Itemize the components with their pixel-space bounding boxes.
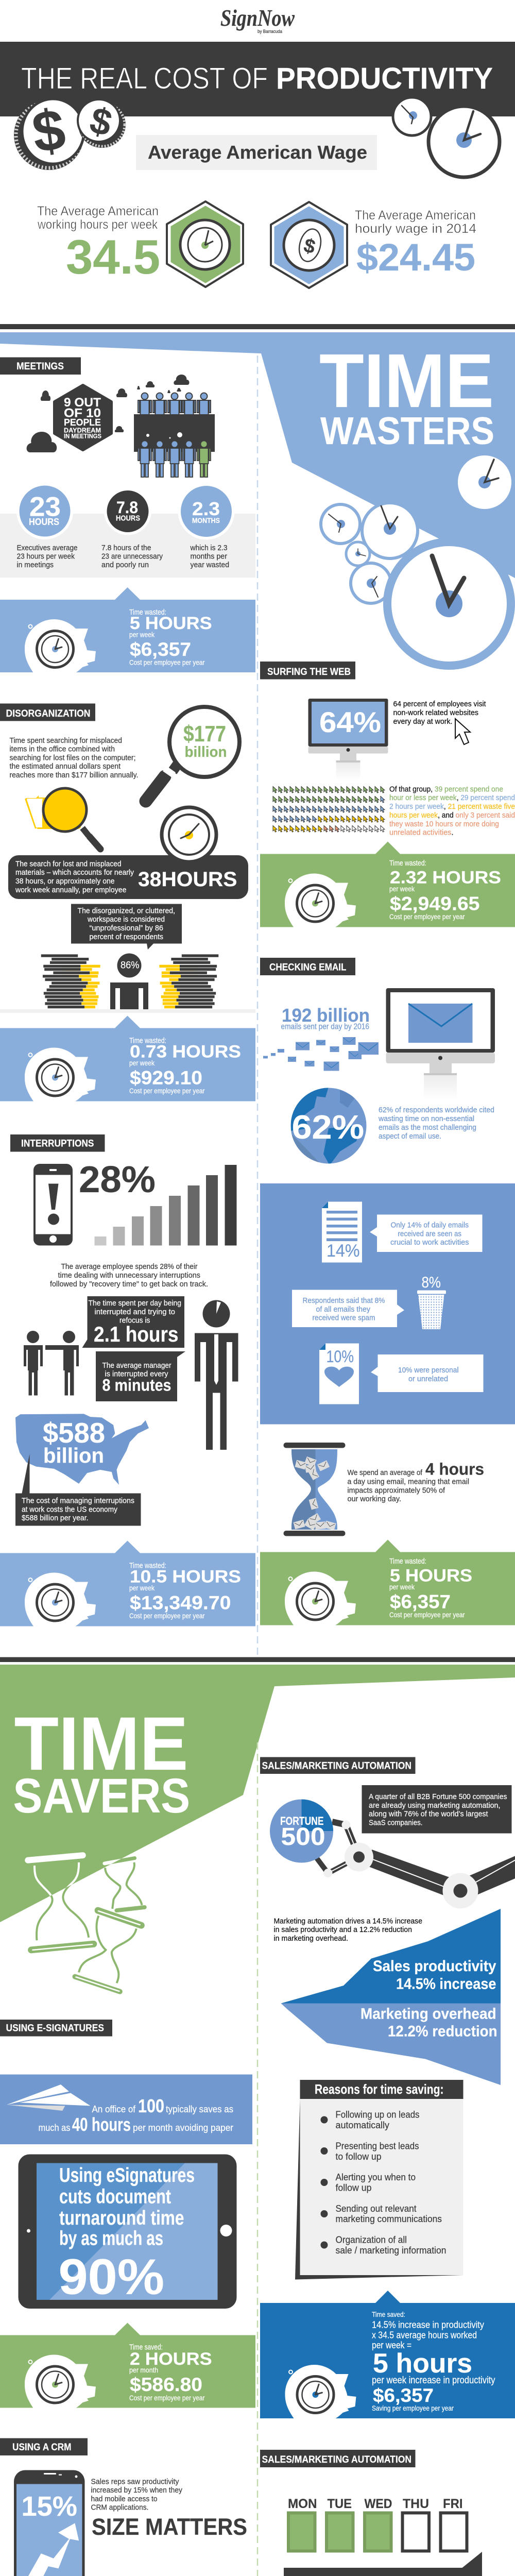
panel: reasons for time saving: Reasons for time saving: xyxy=(315,2081,444,2097)
icon: daydream clouds xyxy=(27,375,190,452)
text: 64 percent visit xyxy=(393,700,486,726)
shape: sales productivity: Sales productivity xyxy=(373,1958,496,1975)
panel: time wasted web: $2,949.65 xyxy=(390,893,480,914)
panel: time saved sales automation: per week = xyxy=(372,2340,411,2350)
chart: rising bars xyxy=(95,1165,237,1246)
panel: email breakdown: 8% xyxy=(421,1274,441,1291)
icon: folder with magnifier xyxy=(25,788,100,849)
tab: meetings xyxy=(0,358,81,375)
heading: time savers: TIME xyxy=(14,1702,188,1786)
text: 4 hours email: 4 hours xyxy=(425,1460,484,1479)
panel: time saved sales automation: Time saved: xyxy=(372,2310,405,2318)
stat: working hours: 34.5 xyxy=(66,230,160,284)
heading: time savers: SAVERS xyxy=(13,1769,190,1823)
icon: clock yellow xyxy=(162,807,216,862)
icon: tablet 90 percent xyxy=(19,2155,237,2309)
icon: clocks xyxy=(393,97,500,177)
icon: smartphone 15 percent: 15% xyxy=(22,2491,77,2522)
text: 64 percent visit: every day at work. xyxy=(393,717,452,726)
icon: magnifier 177 billion: billion xyxy=(184,744,227,760)
panel: time saved esignatures: 2 HOURS xyxy=(130,2349,212,2369)
band: meeting stats: HOURS xyxy=(29,517,59,527)
callout: 2.1 hours xyxy=(82,1296,184,1348)
panel: reasons for time saving: Following up on leads xyxy=(336,2109,419,2120)
panel: time saved sales automation xyxy=(260,2291,515,2418)
shape: marketing overhead: 12.2% reduction xyxy=(388,2023,497,2040)
heading: average american wage xyxy=(136,135,377,170)
callout: cost of interruptions: The cost of managing interruptions xyxy=(22,1496,134,1505)
icon: cursor xyxy=(455,719,470,744)
text: 4 hours email xyxy=(347,1460,484,1503)
text: of that group: unrelated activities. xyxy=(389,828,453,837)
band: meeting stats: in meetings xyxy=(16,561,54,569)
tab: using a crm xyxy=(0,2438,88,2455)
tab: surfing the web: SURFING THE WEB xyxy=(267,667,351,677)
callout: 38 hours: work week annually, per employee xyxy=(15,886,126,894)
band: meeting stats: 7.8 xyxy=(116,498,138,517)
logo: SignNow top: SignNow xyxy=(220,5,295,31)
panel: time wasted interruptions: $13,349.70 xyxy=(130,1592,231,1614)
callout: 38 hours: The search for lost and misplaced xyxy=(15,859,122,869)
panel: time wasted disorganization: Time wasted: xyxy=(129,1037,166,1045)
callout: unprofessional: workspace is considered xyxy=(87,915,165,924)
stat: 192 billion emails: emails sent per day by 2016 xyxy=(281,1022,369,1031)
callout: 8 minutes xyxy=(96,1351,185,1401)
panel: time saved sales automation: x 34.5 average hours worked xyxy=(372,2330,477,2340)
text: of that group: they waste 10 hours or more doing xyxy=(389,820,499,828)
panel: time wasted email: Time wasted: xyxy=(389,1557,426,1566)
panel: email breakdown: received are seen as xyxy=(398,1229,461,1239)
icon: hourglass with emails xyxy=(283,1443,345,1536)
tab: disorganization xyxy=(0,704,95,721)
icon: monitor 64 percent xyxy=(308,699,388,781)
title: PRODUCTIVITY xyxy=(276,62,493,95)
callout: 38 hours xyxy=(8,855,248,899)
panel: time wasted disorganization: per week xyxy=(129,1059,155,1067)
icon: monitor 64 percent: 64% xyxy=(319,706,381,738)
text: 4 hours email: impacts approximately 50% of xyxy=(347,1486,445,1495)
panel: time wasted disorganization: 0.73 HOURS xyxy=(130,1042,241,1061)
icon: green hexagon clock xyxy=(167,201,243,287)
text: 28 percent explanation xyxy=(50,1262,208,1289)
panel: email breakdown: received were spam xyxy=(312,1314,375,1322)
panel: paper savings: An office of xyxy=(92,2104,136,2114)
panel: email breakdown xyxy=(260,1183,515,1424)
callout: unprofessional xyxy=(71,904,182,950)
shape: sales productivity xyxy=(281,1909,501,2003)
tab: sales marketing automation 2 xyxy=(260,2450,415,2467)
text: 28 percent explanation: followed by "recovery time" to get back on track. xyxy=(50,1280,208,1289)
panel: time saved esignatures: Time saved: xyxy=(129,2343,163,2351)
callout: fortune 500 text: along with 76% of the world’s largest xyxy=(369,1809,488,1819)
band: meeting stats: HOURS xyxy=(116,514,140,522)
icon: hexagon 9 out of 10 xyxy=(55,385,111,450)
icon: coins: $ xyxy=(86,99,116,144)
icon: tablet 90 percent: turnaround time xyxy=(59,2207,184,2229)
panel: reasons for time saving: Organization of all xyxy=(336,2235,407,2245)
text: 4 hours email: We spend an average of xyxy=(347,1468,423,1477)
icon: smartphone 15 percent xyxy=(14,2470,84,2576)
panel: time wasted meetings: 5 HOURS xyxy=(130,614,212,633)
icon: tablet 90 percent: 90% xyxy=(59,2248,164,2305)
panel: paper savings: per month avoiding paper xyxy=(133,2123,233,2133)
callout: 8 minutes: 8 minutes xyxy=(102,1376,171,1394)
panel: time wasted meetings: Cost per employee per year xyxy=(129,658,205,667)
callout: 2.1 hours: refocus is xyxy=(119,1316,150,1325)
icon: meeting table with people xyxy=(134,393,215,477)
icon: globe 62 percent: 62% xyxy=(291,1108,364,1146)
callout: unprofessional: “unprofessional” by 86 xyxy=(90,924,163,933)
tab: checking email: CHECKING EMAIL xyxy=(269,962,347,973)
logo: SignNow top: by Barracuda xyxy=(258,29,282,34)
panel: time wasted meetings xyxy=(0,587,255,673)
band: meeting stats: and poorly run xyxy=(101,561,149,569)
icon: US map 588 billion xyxy=(15,1414,149,1485)
panel: time wasted email: Cost per employee per year xyxy=(389,1611,465,1619)
icon: phone alert xyxy=(33,1164,73,1246)
title: THE REAL COST OF xyxy=(21,62,268,95)
chart: work week days: MON xyxy=(288,2497,317,2511)
text: sales reps: CRM applications. xyxy=(91,2503,148,2512)
callout: 2.1 hours: interrupted and trying to xyxy=(95,1308,175,1316)
chart: work week days: FRI xyxy=(443,2497,462,2511)
panel: email breakdown: Only 14% of daily emails xyxy=(390,1221,469,1229)
panel: reasons for time saving: Sending out relevant xyxy=(336,2204,416,2214)
text: 64 percent visit: non-work related websites xyxy=(393,708,478,717)
panel: time wasted disorganization: $929.10 xyxy=(130,1067,202,1088)
text: marketing automation drives: Marketing automation drives a 14.5% increase xyxy=(274,1917,422,1926)
stat: hourly wage: The Average American xyxy=(355,208,476,223)
icon: hourglasses xyxy=(28,1855,145,1992)
panel: reasons for time saving: follow up xyxy=(336,2182,372,2193)
icon: coins: $ xyxy=(28,97,69,165)
stat: working hours: The Average American xyxy=(37,204,159,218)
text: 62 percent: 62% of respondents worldwide cited xyxy=(379,1106,494,1114)
icon: left paper stack xyxy=(41,954,100,1008)
chart: cursor pictogram xyxy=(273,786,385,832)
band: meeting stats: MONTHS xyxy=(192,516,220,524)
callout: 38 hours: 38 hours, or approximately one xyxy=(15,877,114,886)
icon: manager with clock head xyxy=(195,1300,238,1450)
icon: wall clocks xyxy=(321,455,511,666)
text: of that group xyxy=(389,785,515,837)
tab: using a crm: USING A CRM xyxy=(12,2442,71,2453)
text: marketing automation drives: in marketing overhead. xyxy=(274,1934,348,1943)
callout: unprofessional: percent of respondents xyxy=(90,933,163,941)
callout: fortune 500 text xyxy=(362,1785,512,1833)
text: sales reps: Sales reps saw productivity xyxy=(91,2477,179,2486)
panel: time wasted interruptions xyxy=(0,1540,255,1626)
text: marketing automation drives xyxy=(274,1917,422,1943)
panel: reasons for time saving: Alerting you when to xyxy=(336,2172,416,2182)
callout: cost of interruptions: $588 billion per year. xyxy=(22,1514,89,1522)
text: 28 percent explanation: time dealing with unnecessary interruptions xyxy=(58,1271,200,1280)
band: meeting stats: which is 2.3 xyxy=(190,544,228,552)
stat: 28 percent: 28% xyxy=(79,1159,156,1200)
stat: hourly wage: $24.45 xyxy=(356,236,475,279)
panel: paper savings: typically saves as xyxy=(166,2104,233,2114)
callout: 2.1 hours: 2.1 hours xyxy=(94,1322,178,1346)
icon: hexagon 9 out of 10: PEOPLE xyxy=(64,417,101,428)
icon: hexagon 9 out of 10: DAYDREAM xyxy=(64,427,101,434)
text: 62 percent xyxy=(378,1106,494,1141)
callout: fortune 500 text: A quarter of all B2B Fortune 500 companies xyxy=(369,1792,507,1801)
text: 4 hours email: a day using email, meaning that email xyxy=(347,1478,469,1486)
panel: email breakdown: crucial to work activities xyxy=(390,1238,469,1247)
stat: working hours xyxy=(37,204,160,284)
panel: time saved sales automation: 5 hours xyxy=(373,2348,472,2379)
heading: average american wage: Average American Wage xyxy=(148,142,367,163)
panel: time wasted meetings: $6,357 xyxy=(130,639,191,660)
icon: tablet 90 percent: cuts document xyxy=(59,2185,171,2208)
tab: checking email xyxy=(260,958,355,975)
text: 62 percent: aspect of email use. xyxy=(379,1132,441,1141)
icon: hexagon 9 out of 10: OF 10 xyxy=(64,406,101,420)
panel: time saved sales automation: Saving per employee per year xyxy=(372,2404,454,2412)
callout: cost of interruptions: at work costs the US economy xyxy=(22,1505,117,1514)
panel: reasons for time saving xyxy=(295,2080,464,2279)
text: of that group: Of that group, 39 percent spend one xyxy=(389,785,503,793)
chart: work week days: TUE xyxy=(328,2497,352,2511)
text: 62 percent: wasting time on non-essential xyxy=(378,1114,474,1123)
panel: paper savings xyxy=(0,2074,252,2144)
panel: time wasted email xyxy=(260,1539,515,1625)
text: misplaced items xyxy=(9,736,138,779)
icon: US map 588 billion: $588 xyxy=(43,1417,105,1449)
tab: surfing the web xyxy=(260,662,355,679)
chart: work week days: THU xyxy=(403,2497,429,2511)
band: meeting stats: months per xyxy=(191,552,227,561)
shape: marketing overhead xyxy=(281,2003,501,2085)
icon: flying envelopes xyxy=(263,1037,379,1071)
panel: time saved sales automation: per week increase in productivity xyxy=(372,2375,495,2386)
text: sales reps: had mobile access to xyxy=(91,2495,158,2503)
panel: time wasted web: Cost per employee per year xyxy=(389,912,465,921)
callout: cost of interruptions xyxy=(15,1454,141,1526)
tab: meetings: MEETINGS xyxy=(16,361,64,372)
callout: unprofessional: The disorganized, or cluttered, xyxy=(77,907,175,915)
chart: fortune 500 pie xyxy=(270,1799,333,1863)
panel: time wasted web: per week xyxy=(389,885,415,893)
panel: paper savings: much as xyxy=(38,2123,70,2133)
icon: coins xyxy=(14,97,126,170)
callout: fortune 500 text: SaaS companies. xyxy=(369,1819,422,1827)
callout: 8 minutes: is interrupted every xyxy=(105,1369,168,1379)
tab: using e-signatures: USING E-SIGNATURES xyxy=(6,2023,104,2034)
panel: reasons for time saving: Presenting best leads xyxy=(336,2141,419,2151)
stat: hourly wage xyxy=(355,208,476,279)
callout: 8 minutes: The average manager xyxy=(102,1361,171,1370)
icon: tablet 90 percent: by as much as xyxy=(59,2228,163,2249)
panel: reasons for time saving: marketing communications xyxy=(336,2214,442,2224)
heading: time wasters: WASTERS xyxy=(320,409,494,452)
heading: time wasters: TIME xyxy=(319,338,494,423)
panel: time wasted interruptions: Time wasted: xyxy=(129,1561,166,1570)
panel: reasons for time saving: automatically xyxy=(336,2120,389,2130)
tab: interruptions: INTERRUPTIONS xyxy=(21,1139,94,1149)
tab: sales marketing automation xyxy=(260,1757,415,1774)
band: meeting stats: year wasted xyxy=(191,561,229,569)
panel: time saved esignatures xyxy=(0,2323,255,2408)
panel: time wasted meetings: Time wasted: xyxy=(129,608,166,617)
text: sales reps: increased by 15% when they xyxy=(91,2486,182,2495)
icon: right paper stack xyxy=(159,954,218,1008)
icon: blue hexagon coin: $ xyxy=(302,234,317,258)
band: meeting stats: 7.8 hours of the xyxy=(101,544,151,552)
panel: time wasted interruptions: 10.5 HOURS xyxy=(130,1567,241,1587)
panel: time wasted disorganization: Cost per employee per year xyxy=(129,1087,205,1095)
icon: robot arm xyxy=(314,1821,515,1908)
text: misplaced items: searching for lost files on the computer; xyxy=(9,753,136,762)
panel: time saved esignatures: Cost per employee per year xyxy=(129,2394,205,2402)
chart: work week days: WED xyxy=(365,2497,392,2511)
stat: working hours: working hours per week xyxy=(37,217,158,232)
text: 4 hours email: our working day. xyxy=(347,1495,401,1503)
heading: size matters: SIZE MATTERS xyxy=(92,2514,247,2540)
stat: hourly wage: hourly wage in 2014 xyxy=(355,222,476,236)
text: 28 percent explanation: The average employee spends 28% of their xyxy=(61,1262,198,1271)
callout: 2.1 hours: The time spent per day being xyxy=(89,1299,181,1308)
band: meeting stats: 23 are unnecessary xyxy=(101,552,163,561)
icon: tablet 90 percent: Using eSignatures xyxy=(59,2164,195,2187)
text: misplaced items: reaches more than $177 billion annually. xyxy=(9,771,138,779)
text: 64 percent visit: 64 percent of employees visit xyxy=(393,700,486,708)
panel: email breakdown: or unrelated xyxy=(408,1375,448,1383)
icon: magnifier 177 billion xyxy=(146,707,239,801)
panel: email breakdown: Respondents said that 8% xyxy=(303,1296,385,1305)
panel: time saved esignatures: $586.80 xyxy=(130,2374,202,2395)
panel: time wasted meetings: per week xyxy=(129,631,155,639)
callout: 60 percent of available xyxy=(284,2552,482,2576)
title xyxy=(21,62,493,95)
text: 62 percent: emails as the most challenging xyxy=(379,1123,476,1132)
panel: time saved esignatures: per month xyxy=(129,2366,158,2374)
chart: work week days xyxy=(288,2497,467,2551)
tab: disorganization: DISORGANIZATION xyxy=(6,708,91,719)
callout: 38 hours: 38HOURS xyxy=(138,868,237,891)
panel: time wasted web: Time wasted: xyxy=(389,859,426,868)
tab: sales marketing automation: SALES/MARKETING AUTOMATION xyxy=(262,1761,411,1771)
panel: time wasted email: $6,357 xyxy=(390,1591,451,1613)
icon: two colleagues xyxy=(24,1331,79,1395)
chart: fortune 500 pie: 500 xyxy=(281,1823,325,1851)
icon: hexagon 9 out of 10: 9 OUT xyxy=(64,396,101,410)
chart: fortune 500 pie: FORTUNE xyxy=(280,1815,323,1827)
tab: interruptions xyxy=(10,1134,105,1152)
panel: time wasters background xyxy=(0,332,515,578)
panel: time wasted email: per week xyxy=(389,1583,415,1591)
band: meeting stats xyxy=(0,483,255,578)
icon: monitor with envelope xyxy=(386,988,495,1100)
heading: time savers xyxy=(13,1702,190,1823)
panel: time saved sales automation: 14.5% increase in productivity xyxy=(372,2319,484,2330)
panel: reasons for time saving: to follow up xyxy=(336,2151,381,2162)
band: meeting stats: 2.3 xyxy=(192,498,220,519)
panel: email breakdown: 14% xyxy=(327,1241,359,1261)
panel: time wasted interruptions: Cost per employee per year xyxy=(129,1612,205,1620)
text: marketing automation drives: in sales productivity and a 12.2% reduction xyxy=(274,1925,412,1934)
panel: time saved sales automation: $6,357 xyxy=(373,2385,434,2406)
header band xyxy=(0,42,515,116)
panel: time wasted web xyxy=(260,842,515,927)
icon: hexagon 9 out of 10: IN MEETINGS xyxy=(64,433,101,440)
panel: paper savings: 40 hours xyxy=(72,2114,131,2135)
icon: person 86 percent: 86% xyxy=(121,960,140,971)
icon: US map 588 billion: billion xyxy=(43,1444,104,1467)
tab: using e-signatures xyxy=(0,2020,112,2036)
band: meeting stats: Executives average xyxy=(16,544,77,552)
band: meeting stats: 23 xyxy=(29,492,61,522)
text: misplaced items: Time spent searching for misplaced xyxy=(9,736,122,745)
callout: 38 hours: materials – which accounts for nearly xyxy=(15,868,134,877)
icon: blue hexagon coin xyxy=(271,202,347,288)
panel: time wasted disorganization xyxy=(0,1016,255,1101)
panel: email breakdown: of all emails they xyxy=(316,1305,370,1314)
text: misplaced items: items in the office combined with xyxy=(9,745,115,753)
text: misplaced items: the estimated annual dollars spent xyxy=(9,762,121,771)
panel: time savers background xyxy=(0,1665,515,1922)
panel: email breakdown: 10% were personal xyxy=(398,1366,458,1375)
band: meeting stats: 23 hours per week xyxy=(16,552,75,561)
icon: person 86 percent xyxy=(110,953,148,1009)
panel: paper savings: 100 xyxy=(138,2095,164,2116)
stat: 192 billion emails: 192 billion xyxy=(282,1005,370,1026)
shape: sales productivity: 14.5% increase xyxy=(396,1975,496,1993)
panel: email breakdown: 10% xyxy=(327,1347,354,1366)
icon: globe 62 percent xyxy=(290,1087,367,1165)
panel: reasons for time saving: sale / marketing information xyxy=(336,2245,446,2256)
tab: sales marketing automation 2: SALES/MARKETING AUTOMATION xyxy=(262,2454,411,2465)
text: sales reps xyxy=(91,2477,182,2512)
shape: marketing overhead: Marketing overhead xyxy=(360,2005,496,2023)
panel: time wasted email: 5 HOURS xyxy=(390,1566,472,1586)
icon: magnifier 177 billion: $177 xyxy=(183,721,226,747)
panel: time wasted web: 2.32 HOURS xyxy=(390,868,501,887)
callout: fortune 500 text: are already using marketing automation, xyxy=(369,1801,501,1810)
panel: time wasted interruptions: per week xyxy=(129,1584,155,1592)
